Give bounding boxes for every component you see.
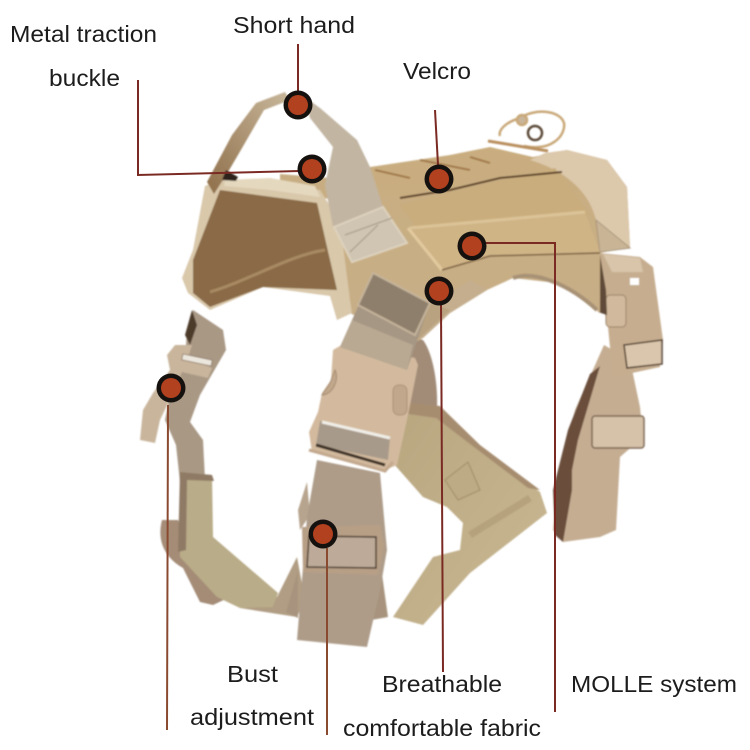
label: Bust adjustment: Bust — [227, 661, 279, 687]
leader line: Velcro — [435, 110, 438, 165]
marker: handle — [284, 90, 312, 120]
left padding — [160, 472, 305, 617]
label: Velcro: Velcro — [403, 58, 471, 84]
center chest buckle — [309, 343, 418, 471]
rope pull ring on top — [488, 112, 564, 151]
label: Breathable comfortable fabric — [343, 671, 541, 741]
leader line: Metal traction buckle — [138, 80, 300, 175]
marker: left buckle — [156, 374, 186, 402]
harness body with MOLLE panel — [335, 147, 630, 345]
inner lining panel — [182, 174, 352, 320]
back strap behind center buckle — [405, 335, 437, 412]
label: Bust adjustment: adjustment — [190, 704, 315, 730]
marker: fabric — [424, 276, 454, 306]
label: Short hand: Short hand — [233, 12, 355, 38]
label: Breathable comfortable fabric: Breathable — [382, 671, 502, 697]
right lower strap — [553, 345, 644, 542]
label: Breathable comfortable fabric: comfortable fabric — [343, 715, 541, 741]
marker: metal buckle — [298, 154, 326, 184]
harness illustration — [140, 92, 663, 647]
label: Metal traction buckle — [10, 21, 157, 91]
right chest padding — [393, 403, 547, 625]
label: Bust adjustment — [190, 661, 315, 730]
leader line: Short hand — [297, 44, 299, 92]
center strap top webbing — [340, 273, 450, 370]
marker: bust adjustment — [308, 520, 338, 548]
label: Metal traction buckle: buckle — [49, 65, 120, 91]
marker: velcro — [424, 164, 454, 194]
left upper strap — [165, 310, 226, 482]
left side buckle — [140, 345, 212, 443]
marker: MOLLE — [458, 232, 486, 260]
center lower strap with keeper — [286, 460, 388, 647]
leader line: left buckle — [167, 405, 168, 730]
leader line: Bust adjustment — [326, 548, 328, 735]
leader line: MOLLE system — [485, 243, 555, 712]
label: Metal traction buckle: Metal traction — [10, 21, 157, 47]
leader line: Breathable comfortable fabric — [441, 305, 443, 672]
label: MOLLE system: MOLLE system — [571, 671, 737, 697]
short handle — [207, 92, 407, 262]
right side buckle — [598, 253, 663, 377]
